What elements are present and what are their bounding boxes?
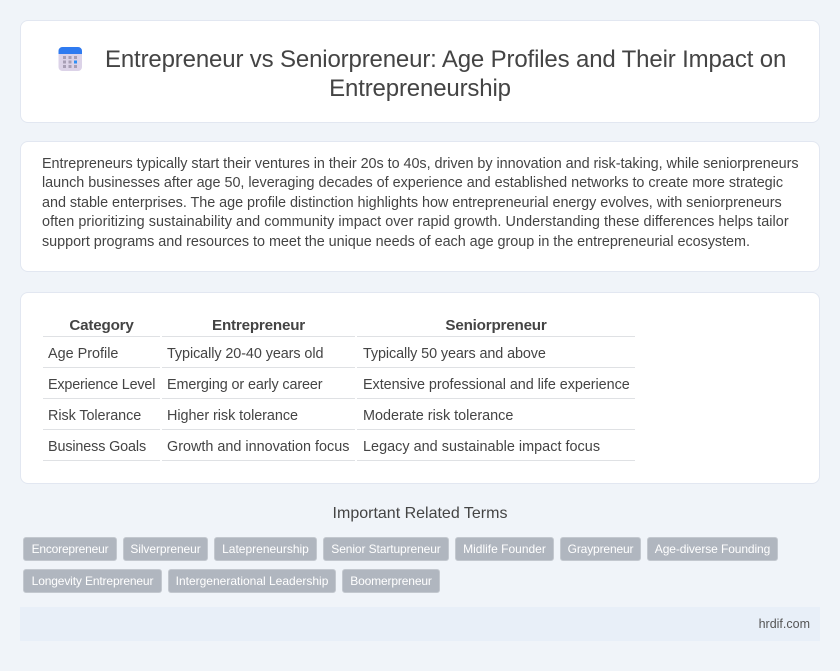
table row: business goals: Growth and innovation focus	[167, 439, 349, 455]
related terms tags: Age-diverse Founding	[655, 542, 770, 556]
related terms tags: Encorepreneur	[32, 542, 108, 556]
footer bar	[20, 607, 820, 641]
footer source: hrdif.com	[759, 617, 810, 631]
table row: age profile	[48, 346, 546, 362]
table row: risk tolerance	[48, 408, 513, 424]
table row: age profile: Typically 20-40 years old	[167, 346, 323, 362]
text block: introduction: launch businesses after age 50, leveraging decades of experience and established networks to create more strategic	[42, 175, 783, 191]
table row: risk tolerance: Higher risk tolerance	[167, 408, 298, 424]
text block: introduction: support programs and resources to meet the unique needs of each age group in the entrepreneurial ecosystem.	[42, 234, 750, 250]
panel: introduction	[20, 141, 820, 272]
table row: risk tolerance: Moderate risk tolerance	[363, 408, 513, 424]
table header	[69, 317, 547, 334]
related terms tags: Boomerpreneur	[350, 574, 432, 588]
related terms tags: Senior Startupreneur	[331, 542, 441, 556]
table row: business goals: Business Goals	[48, 439, 146, 455]
table row: experience level: Emerging or early career	[167, 377, 322, 393]
table row: experience level: Experience Level	[48, 377, 155, 393]
related terms tags: Longevity Entrepreneur	[32, 574, 153, 588]
title: Entrepreneurship	[329, 75, 511, 102]
title	[105, 46, 786, 102]
table row: business goals: Legacy and sustainable impact focus	[363, 439, 600, 455]
related terms tags: Graypreneur	[568, 542, 633, 556]
table row: age profile: Age Profile	[48, 346, 118, 362]
table header: Entrepreneur	[212, 317, 305, 334]
table header: Seniorpreneur	[445, 317, 547, 334]
text block: introduction: and stable enterprises. The age profile distinction highlights how entrepreneurial energy evolves, with seniorpreneurs	[42, 195, 782, 211]
related terms tags: Intergenerational Leadership	[176, 574, 328, 588]
table header: Category	[69, 317, 134, 334]
table row: experience level	[48, 377, 630, 393]
title: Entrepreneur vs Seniorpreneur: Age Profiles and Their Impact on	[105, 46, 786, 73]
text block: introduction: Entrepreneurs typically start their ventures in their 20s to 40s, driven by innovation and risk-taking, while seniorpreneurs	[42, 156, 799, 172]
panel: comparison table	[20, 292, 820, 484]
related terms tags	[23, 537, 778, 593]
text block: introduction	[42, 156, 799, 250]
heading: related terms: Important Related Terms	[333, 505, 507, 522]
icon: calendar	[58, 47, 82, 71]
table row: risk tolerance: Risk Tolerance	[48, 408, 141, 424]
table row: age profile: Typically 50 years and above	[363, 346, 546, 362]
panel: header	[20, 20, 820, 123]
related terms tags: Silverpreneur	[130, 542, 201, 556]
related terms tags: Latepreneurship	[222, 542, 309, 556]
related terms tags: Midlife Founder	[463, 542, 546, 556]
text block: introduction: often prioritizing sustainability and community impact over rapid growth. Understanding these differences helps tailor	[42, 214, 789, 230]
table row: experience level: Extensive professional and life experience	[363, 377, 630, 393]
table row: business goals	[48, 439, 600, 455]
